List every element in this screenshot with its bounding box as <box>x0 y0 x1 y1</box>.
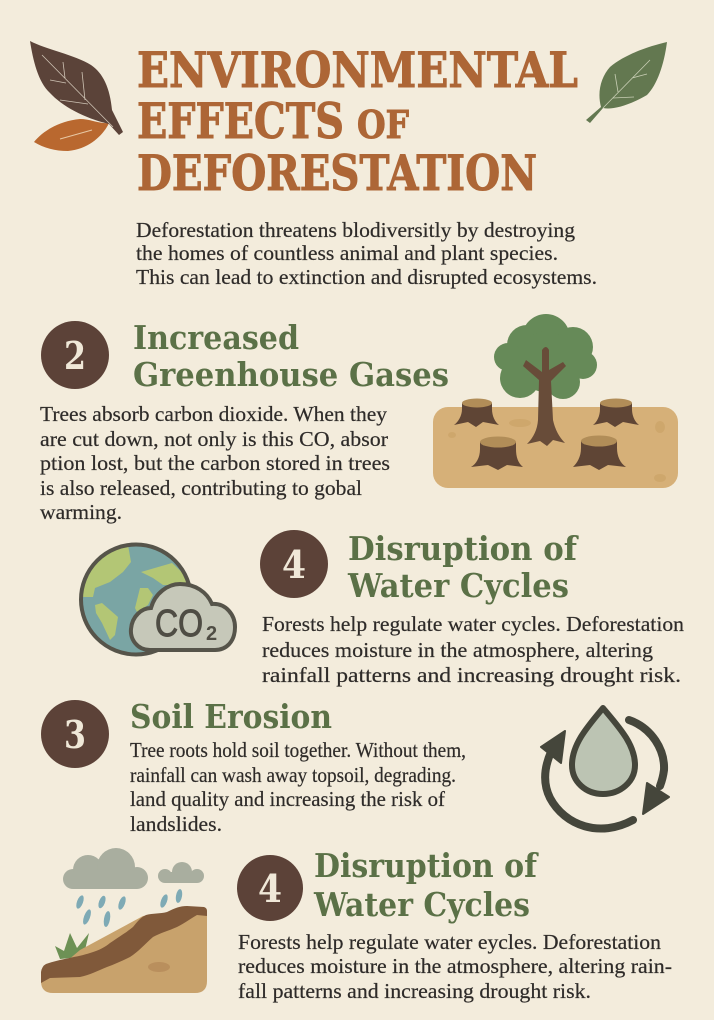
text: soil erosion <box>130 738 466 836</box>
number badge 3: 3 <box>64 712 86 757</box>
number badge 4: 4 <box>282 542 306 587</box>
intro text: Deforestation threatens blodiversitly by destroying <box>136 218 576 242</box>
text: greenhouse gases: ption lost, but the carbon stored in trees <box>40 451 390 475</box>
intro text <box>136 218 597 289</box>
heading: Disruption of Water Cycles: Water Cycles <box>313 885 530 924</box>
icon: earth with CO2 cloud: CO <box>155 603 203 645</box>
heading: Disruption of Water Cycles: Disruption of <box>348 529 579 568</box>
text: water cycles: Forests help regulate water cycles. Deforestation <box>262 612 685 636</box>
icon: rain on eroding hillside <box>41 848 207 993</box>
icon: green leaf <box>586 42 667 123</box>
heading: Increased Greenhouse Gases: Greenhouse Gases <box>133 355 449 394</box>
text: greenhouse gases: Trees absorb carbon dioxide. When they <box>40 402 387 426</box>
heading: Increased Greenhouse Gases: Increased <box>133 318 299 357</box>
text: water cycles repeated: reduces moisture in the atmosphere, altering rain- <box>238 954 672 978</box>
heading: Disruption of Water Cycles: Water Cycles <box>347 566 569 605</box>
number badge 4 <box>260 530 328 598</box>
text: soil erosion: land quality and increasing the risk of <box>130 787 445 811</box>
text: water cycles: reduces moisture in the atmosphere, altering <box>262 638 654 662</box>
icon: tree and stumps on soil <box>433 314 678 488</box>
number badge 2 <box>41 321 109 389</box>
title <box>137 41 578 202</box>
text: soil erosion: landslides. <box>130 812 222 836</box>
text: soil erosion: rainfall can wash away topsoil, degrading. <box>130 763 456 787</box>
text: greenhouse gases: are cut down, not only is this CO, absor <box>40 427 388 451</box>
title: EFFECTS <box>137 92 344 150</box>
intro text: the homes of countless animal and plant species. <box>136 241 558 265</box>
number badge 3 <box>41 700 109 768</box>
text: greenhouse gases: is also released, contributing to gobal <box>40 476 362 500</box>
icon: earth with CO2 cloud <box>80 544 235 654</box>
title: DEFORESTATION <box>137 144 537 202</box>
text: water cycles repeated <box>238 930 672 1003</box>
text: greenhouse gases: warming. <box>40 500 122 524</box>
text: water cycles <box>262 612 685 687</box>
heading: Disruption of Water Cycles: Disruption of <box>314 846 539 885</box>
heading: Disruption of Water Cycles <box>347 529 579 605</box>
heading: Soil Erosion: Soil Erosion <box>130 697 332 736</box>
text: water cycles: rainfall patterns and increasing drought risk. <box>262 663 681 687</box>
heading: Increased Greenhouse Gases <box>133 318 449 394</box>
text: water cycles repeated: fall patterns and increasing drought risk. <box>238 979 591 1003</box>
number badge 4: 4 <box>258 866 282 911</box>
icon: dark brown and orange leaves <box>30 41 123 151</box>
text: greenhouse gases <box>40 402 390 524</box>
icon: earth with CO2 cloud: 2 <box>206 623 217 645</box>
title: OF <box>357 102 409 147</box>
heading: Disruption of Water Cycles <box>313 846 539 924</box>
text: soil erosion: Tree roots hold soil together. Without them, <box>130 738 466 762</box>
title: ENVIRONMENTAL <box>137 41 578 99</box>
icon: water drop with cycle arrows <box>541 708 669 829</box>
number badge 2: 2 <box>64 333 86 378</box>
text: water cycles repeated: Forests help regulate water eycles. Deforestation <box>238 930 662 954</box>
number badge 4 <box>237 855 303 921</box>
intro text: This can lead to extinction and disrupted ecosystems. <box>136 265 597 289</box>
